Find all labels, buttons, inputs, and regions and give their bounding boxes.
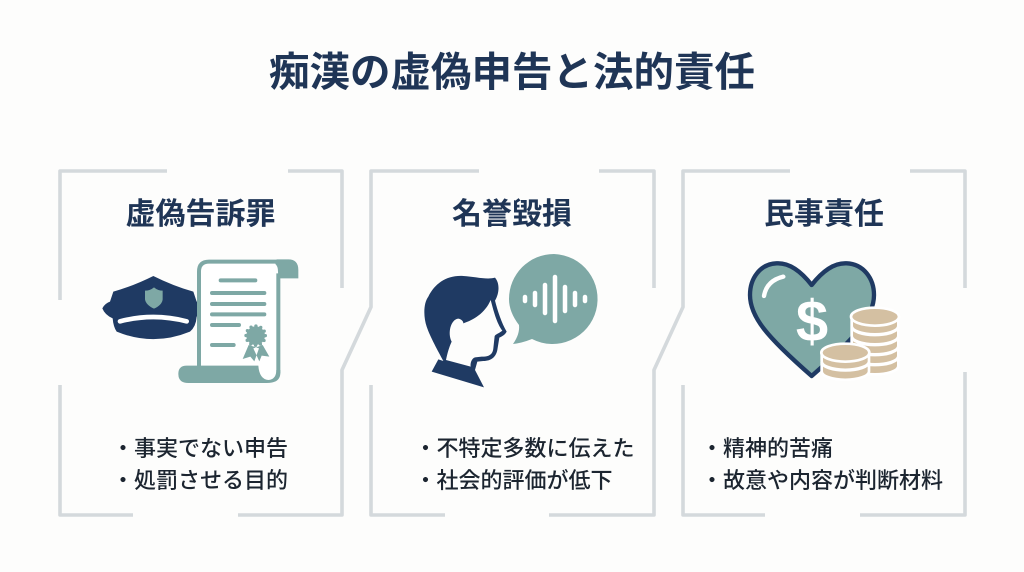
heading: 名誉毀損: 名誉毀損	[452, 198, 572, 231]
panel: 民事責任	[683, 171, 965, 515]
heading: 虚偽告訴罪: 虚偽告訴罪	[126, 198, 276, 231]
icon: speech bubble with sound wave	[509, 254, 598, 344]
panel: 虚偽告訴罪	[60, 171, 479, 515]
panel frame: 虚偽告訴罪	[60, 171, 479, 515]
bullet list: 民事責任: ・故意や内容が判断材料	[701, 468, 943, 493]
panel frame: 名誉毀損	[371, 171, 790, 515]
bullet list: 虚偽告訴罪	[112, 436, 288, 493]
bullet list: 虚偽告訴罪: ・事実でない申告	[112, 436, 288, 461]
panel: 名誉毀損	[371, 171, 790, 515]
icon: coin stacks	[821, 308, 899, 380]
icon: certificate scroll	[178, 259, 298, 383]
bullet list: 民事責任: ・精神的苦痛	[701, 436, 833, 461]
bullet list: 名誉毀損: ・社会的評価が低下	[414, 468, 613, 493]
heading: 民事責任: 民事責任	[764, 198, 884, 231]
icon: heart	[750, 263, 874, 376]
icon: heart: $	[796, 289, 828, 354]
bullet list: 虚偽告訴罪: ・処罰させる目的	[112, 468, 288, 493]
bullet list: 名誉毀損: ・不特定多数に伝えた	[414, 436, 635, 461]
bullet list: 民事責任	[701, 436, 943, 493]
bullet list: 名誉毀損	[414, 436, 635, 493]
title: 痴漢の虚偽申告と法的責任	[269, 49, 755, 95]
icon: police cap	[102, 276, 205, 339]
icon: speaking head	[424, 276, 507, 387]
panel frame: 民事責任	[683, 171, 965, 515]
